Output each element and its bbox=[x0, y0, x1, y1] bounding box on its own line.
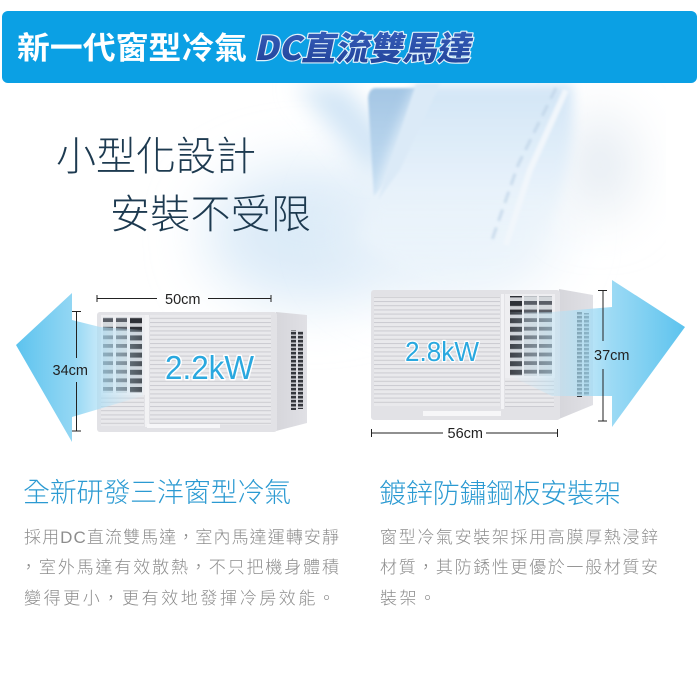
paragraph: 材質，其防銹性更優於一般材質安 bbox=[380, 558, 658, 577]
side panel bbox=[276, 312, 307, 431]
banner title white: 新一代窗型冷氣 bbox=[17, 23, 247, 68]
height dimension 37cm bbox=[594, 290, 629, 421]
air conditioner: 2.2kW bbox=[97, 312, 307, 432]
paragraph bbox=[20, 528, 339, 608]
main heading: 小型化設計 bbox=[56, 124, 256, 182]
air conditioner: 2.8kW bbox=[371, 289, 593, 420]
width dimension 50cm: 50cm bbox=[165, 292, 200, 308]
width dimension 50cm bbox=[97, 292, 271, 308]
width dimension 56cm: 56cm bbox=[448, 426, 483, 442]
paragraph: ，室外馬達有效散熱，不只把機身體積 bbox=[20, 558, 339, 577]
paragraph: 窗型冷氣安裝架採用高膜厚熱浸鋅 bbox=[380, 528, 658, 547]
paragraph: 採用DC直流雙馬達，室內馬達運轉安靜 bbox=[24, 528, 339, 547]
arrow: right airflow bbox=[510, 280, 685, 427]
height dimension 34cm bbox=[52, 312, 88, 431]
main heading bbox=[56, 124, 311, 240]
capacity label 2.2kW: 2.2kW bbox=[165, 349, 255, 386]
width dimension 56cm bbox=[372, 426, 558, 442]
banner title DC motor: DC直流雙馬達 bbox=[252, 21, 479, 70]
main heading: 安裝不受限 bbox=[110, 182, 311, 240]
text block: galvanized bracket bbox=[379, 472, 658, 608]
paragraph: 裝架。 bbox=[380, 589, 436, 608]
paragraph bbox=[380, 528, 658, 608]
text block: new development bbox=[20, 471, 339, 608]
header banner bbox=[2, 11, 697, 83]
arrow: left airflow bbox=[16, 293, 143, 442]
side panel bbox=[559, 289, 593, 419]
paragraph: 變得更小，更有效地發揮冷房效能。 bbox=[24, 589, 335, 608]
capacity label 2.8kW: 2.8kW bbox=[405, 336, 480, 367]
height dimension 37cm: 37cm bbox=[594, 348, 629, 364]
height dimension 34cm: 34cm bbox=[52, 363, 88, 379]
heading: 鍍鋅防鏽鋼板安裝架 bbox=[379, 472, 621, 511]
heading: 全新研發三洋窗型冷氣 bbox=[23, 471, 291, 510]
